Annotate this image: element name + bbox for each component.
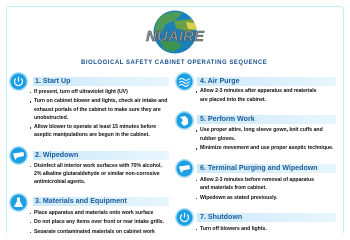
text: Turn off blowers and lights. — [200, 226, 267, 232]
section 4: air purge — [175, 72, 336, 102]
icon: wipe cloth — [9, 146, 28, 165]
icon: flask — [9, 193, 28, 212]
section 1: start up — [9, 72, 169, 138]
heading: 7. Shutdown — [200, 212, 242, 220]
heading: 5. Perform Work — [200, 114, 255, 122]
text: and materials from cabinet. — [200, 184, 267, 190]
section 5: perform work — [175, 111, 336, 151]
heading: 1. Start Up — [35, 76, 70, 84]
text: Wipedown as stated previously. — [200, 194, 277, 200]
text: unobstructed. — [34, 114, 68, 120]
text: Place apparatus and materials onto work surface — [34, 210, 153, 216]
heading: 3. Materials and Equipment — [35, 196, 127, 204]
section 2: wipedown — [9, 146, 169, 185]
icon: wipe cloth — [175, 159, 194, 178]
section 3: materials and equipment — [9, 193, 169, 233]
text: Use proper attire, long sleeve gown, knit cuffs and — [200, 127, 323, 133]
text: aseptic manipulations are begun in the cabinet. — [34, 132, 150, 138]
text: Disinfect all interior work surfaces with 70% alcohol, — [34, 162, 162, 168]
logo: globe with NUAIRE wordmark — [146, 10, 205, 54]
icon: power — [175, 208, 194, 227]
icon: power — [9, 72, 28, 91]
icon: air waves — [175, 72, 194, 91]
text: If present, turn off ultraviolet light (UV) — [34, 88, 128, 94]
text: rubber gloves. — [200, 136, 235, 142]
icon: worker — [175, 111, 194, 130]
section 6: terminal purging and wipedown — [175, 159, 336, 200]
text: are placed into the cabinet. — [200, 96, 266, 102]
text: 2% alkaline glutaraldehyde or similar non-corrosive — [34, 170, 160, 176]
heading: 2. Wipedown — [35, 150, 78, 158]
text: Minimize movement and use proper aseptic technique. — [200, 145, 333, 151]
text: Allow blower to operate at least 15 minutes before — [34, 124, 156, 130]
text: Allow 2-3 minutes after apparatus and materials — [200, 88, 316, 94]
text: Do not place any items over front or rear intake grills. — [34, 218, 164, 224]
heading: 4. Air Purge — [200, 76, 240, 84]
logo: globe with NUAIRE wordmark: NUAIRE — [146, 29, 205, 45]
text: Allow 2-3 minutes before removal of apparatus — [200, 176, 314, 182]
text: antimicrobial agents. — [34, 179, 85, 185]
text: exhaust portals of the cabinet to make sure they are — [34, 106, 161, 112]
section 7: shutdown — [175, 208, 336, 232]
title: BIOLOGICAL SAFETY CABINET OPERATING SEQUENCE — [81, 60, 267, 66]
text: Turn on cabinet blower and lights, check air intake and — [34, 98, 167, 104]
heading: 6. Terminal Purging and Wipedown — [200, 164, 318, 172]
